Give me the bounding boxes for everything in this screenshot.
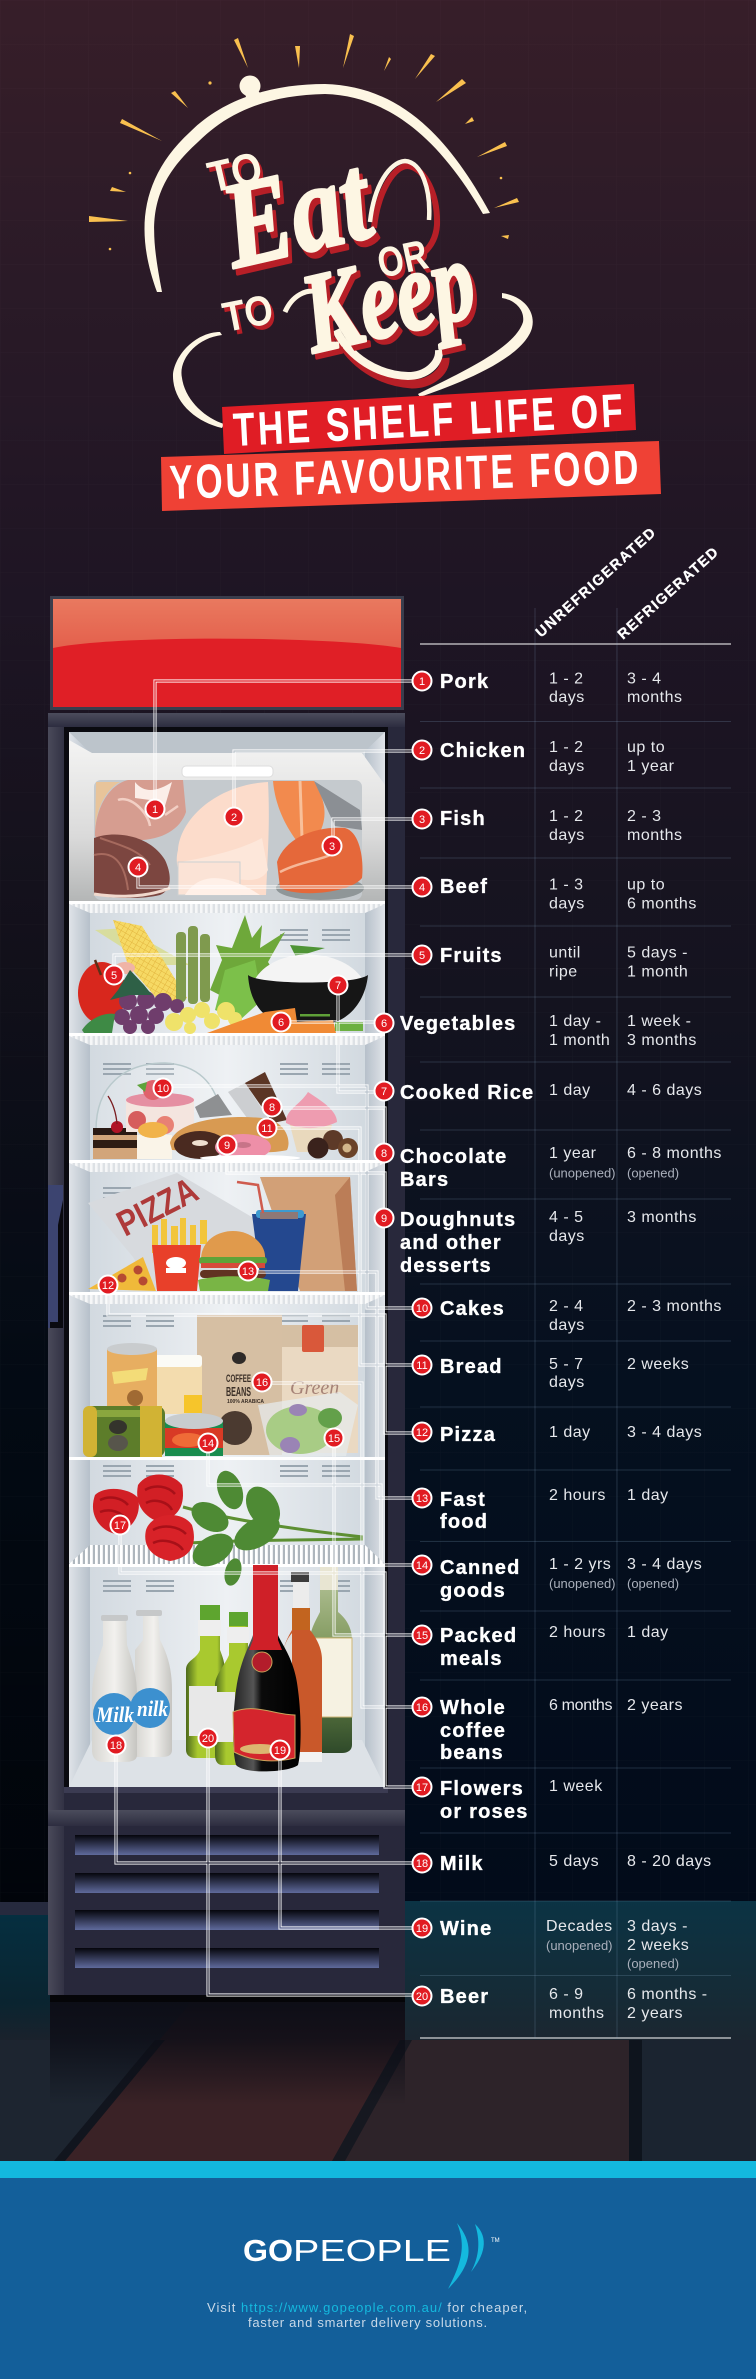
row: Chicken: days — [549, 758, 585, 775]
row: Beer: 6 months - — [627, 1986, 708, 2003]
pizza box: PIZZA — [110, 1169, 204, 1244]
salad box — [258, 1392, 358, 1457]
row: Flowers or roses: 1 week — [549, 1778, 603, 1795]
orange bottle — [282, 1572, 322, 1762]
row: Canned goods: 3 - 4 days — [627, 1556, 702, 1573]
apple — [78, 960, 135, 1024]
row: Beer: 2 years — [627, 2005, 683, 2022]
row: Whole coffee beans: 2 years — [627, 1697, 683, 1714]
row: Fruits: 5 days - — [627, 944, 688, 962]
row: Chocolate Bars: (opened) — [627, 1166, 679, 1180]
row: Pizza: 1 day — [549, 1424, 591, 1441]
word: Or: OR — [376, 234, 435, 291]
row: Chocolate Bars: 8 — [381, 1148, 387, 1160]
pork — [95, 780, 186, 840]
row: Canned goods: Canned — [440, 1557, 521, 1579]
row: Cakes: 10 — [416, 1303, 428, 1315]
pizza box — [88, 1169, 257, 1290]
row: Canned goods: 1 - 2 yrs — [549, 1556, 611, 1573]
row: Cakes: Cakes — [440, 1298, 505, 1320]
row: Cooked Rice — [374, 1082, 702, 1104]
numbered markers in fridge: 17 — [114, 1520, 126, 1532]
shelf 6: roses — [93, 1467, 363, 1588]
table column headers — [533, 525, 722, 643]
Go People logo — [243, 2223, 500, 2289]
row: Cakes: 2 - 3 months — [627, 1298, 722, 1315]
row: Pork — [412, 670, 682, 706]
bread — [170, 1117, 289, 1153]
row: Canned goods: (opened) — [627, 1576, 679, 1591]
coffee beans bag: BEANS — [226, 1384, 251, 1399]
row: Packed meals: 15 — [416, 1630, 428, 1642]
row: Chicken: Chicken — [440, 740, 526, 762]
row: Whole coffee beans: Whole — [440, 1697, 506, 1719]
footer — [0, 2161, 756, 2379]
row: Bread: 2 weeks — [627, 1356, 689, 1373]
jar — [150, 1355, 202, 1414]
subtitle banners — [161, 383, 661, 511]
fridge door handle — [48, 1185, 63, 1328]
row: Chicken: up to — [627, 739, 665, 756]
cloche knob — [238, 76, 265, 103]
row: Packed meals: Packed — [440, 1625, 517, 1647]
row: Beef: days — [549, 896, 585, 912]
row: Vegetables: Vegetables — [400, 1013, 517, 1035]
beef — [94, 834, 170, 898]
row: Bread: Bread — [440, 1356, 503, 1378]
row: Vegetables: 1 day - — [549, 1013, 601, 1030]
numbered markers in fridge: 1 — [152, 804, 158, 816]
fridge interior — [69, 732, 385, 1787]
row: Bread: 11 — [416, 1360, 428, 1372]
numbered markers in fridge: 18 — [110, 1740, 122, 1752]
milk bottles: nilk — [137, 1696, 168, 1721]
row: Cakes: 2 - 4 — [549, 1298, 584, 1315]
row: Wine: Decades — [546, 1918, 613, 1935]
row: Packed meals: 2 hours — [549, 1624, 606, 1641]
pizza slice — [88, 1257, 156, 1291]
shelf 7: bottles — [92, 1565, 352, 1771]
row: Bread: days — [549, 1374, 585, 1391]
green paper bag — [282, 1325, 358, 1453]
row: Doughnuts and other desserts — [374, 1208, 697, 1277]
row: Pork: 3 - 4 — [627, 670, 662, 688]
row: Milk: 8 - 20 days — [627, 1853, 712, 1870]
footer call to action: faster and smarter delivery solutions. — [248, 2315, 488, 2330]
yellow rays — [89, 34, 519, 250]
plate — [200, 1155, 300, 1161]
row: Vegetables: 6 — [381, 1018, 387, 1030]
word: Or: OR — [373, 230, 432, 287]
row: Fast food: 13 — [416, 1493, 428, 1505]
row: Beer: Beer — [440, 1986, 489, 2008]
row: Vegetables: 3 months — [627, 1032, 697, 1049]
row: Pork: months — [627, 689, 682, 706]
row: Doughnuts and other desserts: and other — [400, 1232, 502, 1254]
row: Doughnuts and other desserts: desserts — [400, 1255, 492, 1277]
row: Beer — [412, 1986, 708, 2022]
milk bottles: Milk — [95, 1702, 134, 1727]
row: Beef: up to — [627, 876, 665, 894]
yellow grapes — [165, 1002, 242, 1034]
word: To: TO — [206, 147, 270, 207]
row: Canned goods: 14 — [416, 1560, 428, 1572]
word: To: TO — [203, 143, 267, 203]
row: Doughnuts and other desserts: 9 — [381, 1213, 387, 1225]
row: Fish: months — [627, 827, 682, 844]
row: Milk: 18 — [416, 1858, 428, 1870]
row: Chicken: 1 year — [627, 758, 675, 775]
cloche plate right curve — [418, 293, 533, 397]
row: Chicken: 2 — [419, 745, 425, 757]
row: Beer: 6 - 9 — [549, 1986, 584, 2003]
row: Fish: days — [549, 827, 585, 844]
banner: The shelf life of: THE SHELF LIFE OF — [232, 383, 627, 456]
row: Pork: days — [549, 689, 585, 706]
row: Beef: 1 - 3 — [549, 876, 584, 894]
row: Canned goods: goods — [440, 1580, 506, 1602]
row: Pizza: 12 — [416, 1427, 428, 1439]
row: Fish: 1 - 2 — [549, 808, 584, 825]
row: Wine: 2 weeks — [627, 1937, 689, 1954]
footer blue panel — [0, 2178, 756, 2379]
row: Wine: 19 — [416, 1923, 428, 1935]
row: Pork: Pork — [440, 671, 489, 693]
white wine bottle — [310, 1567, 352, 1753]
shelf 3: desserts — [93, 1063, 358, 1161]
row: Pizza: 3 - 4 days — [627, 1424, 702, 1441]
row: Wine: (unopened) — [546, 1938, 612, 1953]
row: Chocolate Bars: Chocolate — [400, 1146, 507, 1168]
row: Milk: 5 days — [549, 1853, 599, 1870]
fish — [273, 781, 364, 900]
row: Whole coffee beans — [412, 1697, 683, 1764]
swash of Eat — [370, 161, 437, 256]
fridge — [48, 596, 405, 2002]
coffee beans bag: 100% ARABICA — [227, 1399, 264, 1405]
Go People logo: PEOPLE — [293, 2233, 451, 2268]
row: Vegetables: 1 month — [549, 1032, 610, 1049]
numbered markers in fridge: 19 — [274, 1745, 286, 1757]
row: Fast food: Fast — [440, 1489, 486, 1511]
row: Cakes — [412, 1298, 722, 1334]
row: Milk — [412, 1853, 712, 1875]
row: Fast food: 1 day — [627, 1487, 669, 1504]
row: Pizza: Pizza — [440, 1424, 496, 1446]
strawberry cake — [126, 1080, 194, 1134]
row: Pork: 1 - 2 — [549, 670, 584, 688]
row: Cooked Rice: 1 day — [549, 1082, 591, 1099]
rice bowl — [248, 954, 368, 1024]
coffee beans bag — [197, 1315, 282, 1455]
row: Beef: 4 — [419, 882, 425, 894]
title: cloche illustration — [89, 34, 533, 428]
row: Flowers or roses: 17 — [416, 1782, 428, 1794]
shelf 4: pizza and fast food — [88, 1169, 357, 1291]
row: Packed meals: 1 day — [627, 1624, 669, 1641]
cloche plate left curve — [173, 332, 224, 428]
fries — [152, 1218, 207, 1253]
row: Fish — [412, 808, 682, 844]
numbered markers in fridge: 11 — [261, 1123, 273, 1135]
row: Vegetables — [374, 1013, 697, 1049]
word: To (second): TO — [219, 285, 277, 341]
row: Flowers or roses — [412, 1778, 603, 1823]
numbered markers in fridge: 15 — [328, 1433, 340, 1445]
row: Fast food — [412, 1487, 669, 1533]
row: Cakes: days — [549, 1317, 585, 1334]
title: To Eat or To Keep — [203, 129, 490, 384]
fries box — [152, 1245, 201, 1291]
asparagus — [176, 926, 210, 1004]
table column headers: REFRIGERATED — [615, 545, 722, 643]
numbered markers in fridge: 2 — [231, 812, 237, 824]
numbered markers in fridge: 14 — [202, 1438, 214, 1450]
swash of Keep — [285, 291, 445, 384]
row: Cooked Rice: 4 - 6 days — [627, 1082, 702, 1099]
row: Flowers or roses: Flowers — [440, 1778, 524, 1800]
burger — [198, 1231, 270, 1291]
numbered markers in fridge: 12 — [102, 1280, 114, 1292]
row: Chicken: 1 - 2 — [549, 739, 584, 756]
champagne bottle — [233, 1565, 301, 1771]
row: Fruits: ripe — [549, 964, 578, 980]
fridge body — [48, 713, 405, 2002]
table grid lines — [420, 608, 731, 2038]
chocolate truffles — [308, 1130, 358, 1158]
row: Vegetables: 1 week - — [627, 1013, 691, 1030]
word: Eat: Eat — [209, 129, 385, 294]
drink cup — [237, 1182, 306, 1291]
shelves — [69, 901, 385, 1567]
row: Whole coffee beans: 16 — [416, 1702, 428, 1714]
cloche dome — [145, 84, 490, 292]
row: Beef — [412, 876, 697, 912]
table column headers: UNREFRIGERATED — [533, 525, 659, 641]
fridge vents — [75, 1835, 379, 1968]
row: Canned goods — [412, 1556, 702, 1602]
rose stems — [183, 1507, 363, 1543]
row: Fish: Fish — [440, 808, 486, 830]
row: Chocolate Bars: Bars — [400, 1169, 449, 1191]
word: Keep: Keep — [293, 220, 490, 383]
row: Wine: Wine — [440, 1918, 492, 1940]
row: Fish: 3 — [419, 814, 425, 826]
row: Wine: (opened) — [627, 1956, 679, 1971]
shelf 5: packaged goods — [83, 1315, 358, 1457]
row: Cooked Rice: Cooked Rice — [400, 1082, 534, 1104]
row: Canned goods: (unopened) — [549, 1576, 616, 1591]
green paper bag: Green — [290, 1377, 339, 1399]
shelf 2: fruit, vegetables and rice — [78, 915, 368, 1034]
paper bag — [260, 1177, 357, 1291]
row: Doughnuts and other desserts: 3 months — [627, 1209, 697, 1226]
row: Fruits: until — [549, 944, 581, 962]
rose leaves — [186, 1467, 287, 1588]
row: Fish: 2 - 3 — [627, 808, 662, 825]
row: Beer: 20 — [416, 1991, 428, 2003]
row: Pork: 1 — [419, 676, 425, 688]
numbered markers in fridge: 16 — [256, 1377, 268, 1389]
row: Fast food: food — [440, 1511, 488, 1533]
green can lying — [83, 1406, 165, 1457]
row: Chocolate Bars: (unopened) — [549, 1166, 616, 1180]
footer call to action: Visit https://www.gopeople.com.au/ for cheaper, — [207, 2300, 528, 2315]
word: Eat: Eat — [213, 135, 389, 300]
row: Whole coffee beans: beans — [440, 1742, 504, 1764]
row: Flowers or roses: or roses — [440, 1801, 529, 1823]
row: Bread — [412, 1356, 689, 1391]
row: Pizza — [412, 1422, 702, 1446]
row: Fruits — [412, 944, 688, 980]
numbered markers in fridge: 6 — [278, 1017, 284, 1029]
row: Fruits: 5 — [419, 950, 425, 962]
cupcake — [286, 1092, 337, 1152]
herbs — [210, 915, 325, 1020]
numbered markers in fridge: 3 — [329, 841, 335, 853]
row: Whole coffee beans: coffee — [440, 1720, 506, 1742]
footer cyan stripe — [0, 2161, 756, 2178]
Go People logo: GO — [243, 2233, 293, 2268]
chicken — [177, 782, 269, 895]
row: Doughnuts and other desserts: Doughnuts — [400, 1209, 516, 1231]
row: Beef: Beef — [440, 876, 488, 898]
row: Doughnuts and other desserts: 4 - 5 — [549, 1209, 584, 1226]
row: Bread: 5 - 7 — [549, 1356, 584, 1373]
word: To (second): TO — [222, 289, 280, 345]
corn — [95, 920, 190, 1008]
row: Doughnuts and other desserts: days — [549, 1228, 585, 1245]
row: Fruits: Fruits — [440, 945, 503, 967]
beer bottles — [186, 1605, 252, 1765]
row: Chocolate Bars: 1 year — [549, 1145, 597, 1162]
numbered markers in fridge: 4 — [135, 862, 141, 874]
numbered markers in fridge: 8 — [269, 1102, 275, 1114]
row: Wine — [412, 1918, 689, 1971]
floor tiles — [0, 1901, 756, 2161]
carrot — [207, 1008, 363, 1033]
numbered markers in fridge: 13 — [242, 1266, 254, 1278]
small can — [165, 1413, 223, 1456]
connector lines — [108, 681, 412, 1995]
numbered markers in fridge: 5 — [111, 970, 117, 982]
footer call to action — [207, 2300, 528, 2330]
red roses — [93, 1474, 194, 1561]
row: Beer: months — [549, 2005, 604, 2022]
meat tray — [69, 740, 385, 901]
row: Cooked Rice: 7 — [381, 1086, 387, 1098]
row: Fast food: 2 hours — [549, 1487, 606, 1504]
numbered markers in fridge — [98, 800, 348, 1760]
row: Fruits: 1 month — [627, 964, 688, 980]
shelf life table — [374, 525, 731, 2038]
row: Milk: Milk — [440, 1853, 484, 1875]
row: Chocolate Bars — [374, 1144, 722, 1191]
row: Whole coffee beans: 6 months — [549, 1697, 613, 1714]
numbered markers in fridge: 7 — [335, 980, 341, 992]
banner: The shelf life of — [222, 383, 636, 456]
row: Wine: 3 days - — [627, 1918, 688, 1935]
numbered markers in fridge: 9 — [224, 1140, 230, 1152]
fridge top sign — [50, 596, 404, 710]
row: Chicken — [412, 739, 675, 775]
pastry — [137, 1122, 172, 1159]
numbered markers in fridge: 10 — [157, 1083, 169, 1095]
row: Chocolate Bars: 6 - 8 months — [627, 1145, 722, 1162]
Go People logo: TM — [491, 2238, 500, 2244]
coffee beans bag: COFFEE — [226, 1373, 251, 1385]
numbered markers in fridge: 20 — [202, 1733, 214, 1745]
chocolate cake — [93, 1096, 137, 1159]
shelf 1: meats — [69, 740, 385, 901]
upright can — [107, 1343, 157, 1409]
milk bottles — [92, 1610, 172, 1762]
grapes — [82, 970, 184, 1034]
row: Beef: 6 months — [627, 896, 697, 912]
row: Packed meals: meals — [440, 1648, 503, 1670]
doughnuts — [174, 1131, 271, 1160]
chocolate bar — [195, 1072, 287, 1123]
glass dome — [96, 1063, 220, 1130]
word: Keep: Keep — [289, 215, 486, 378]
row: Packed meals — [412, 1624, 669, 1670]
